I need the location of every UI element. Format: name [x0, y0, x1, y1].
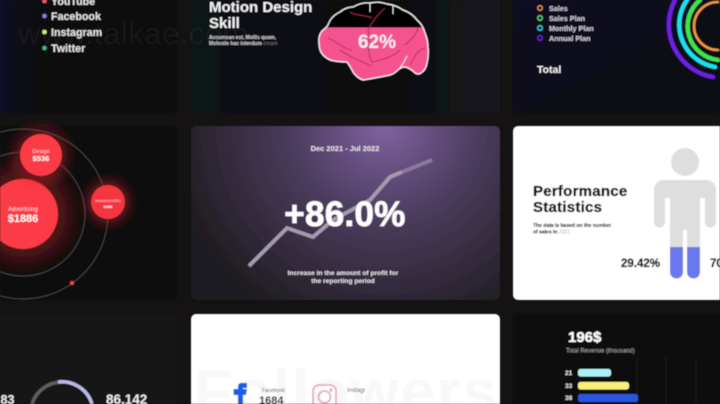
text block: skill description: Accumsan est, Mollis quam, [209, 35, 276, 41]
heading: performance statistics: Statistics [533, 199, 602, 216]
bar chart: revenue: 38 [565, 395, 573, 402]
panel: donut stats [0, 314, 177, 404]
legend: Twitter: Twitter [51, 43, 85, 55]
bar chart: revenue: 21 [565, 370, 573, 377]
legend: Annual Plan: Annual Plan [549, 34, 591, 43]
panel: expense orbits [0, 119, 177, 300]
panel: social legend [0, 0, 177, 113]
chart: profit line [249, 160, 432, 266]
icon: facebook [234, 383, 247, 404]
text block: performance note: The data is based on the number [533, 223, 611, 229]
bubble: design [6, 121, 76, 188]
label: total: Total [537, 64, 561, 76]
panel: performance statistics [513, 126, 720, 300]
chart: donut [32, 382, 92, 404]
icon: person figure [654, 148, 716, 279]
heading: motion design skill: Skill [209, 15, 240, 32]
bubble: investments: $486 [104, 204, 113, 209]
stat: facebook followers [259, 388, 285, 404]
stat: 29.42%: 29.42% [621, 258, 660, 270]
icon: brain 62% [319, 2, 428, 80]
legend: Sales Plan: Sales Plan [549, 14, 585, 23]
orbit rings [0, 129, 108, 299]
panel: sales plan rings [513, 0, 720, 113]
panel: total revenue [513, 314, 720, 404]
legend: Monthly Plan: Monthly Plan [549, 24, 594, 33]
bubble: investments [78, 172, 138, 232]
text block: skill description: Molestie hac interdum ornare [209, 41, 278, 47]
orbit dot [70, 281, 74, 285]
stat: 196$: 196$ [568, 329, 602, 346]
icon: instagram [313, 385, 336, 404]
text block: profit caption: Increase in the amount of profit for [288, 270, 398, 277]
bar chart: revenue: 33 [565, 383, 573, 390]
stat: +86.0%: +86.0% [284, 195, 406, 234]
label: instagram: Instagr [347, 388, 365, 394]
legend: Sales [538, 4, 568, 13]
label: date range: Dec 2021 - Jul 2022 [311, 144, 379, 153]
legend: Sales: Sales [549, 4, 568, 13]
bubble: advertising [0, 152, 85, 276]
panel: profit increase [191, 126, 500, 300]
bar chart: revenue [565, 358, 696, 404]
bubble: advertising: $1886 [8, 213, 38, 225]
icon: brain 62%: 62% [358, 32, 396, 53]
watermark: www.talkae.com [17, 16, 249, 51]
bubble: design: $536 [33, 154, 49, 163]
heading: performance statistics: Performance [533, 183, 627, 200]
text block: performance note: of sales in 2021 [533, 230, 570, 236]
label: total revenue: Total Revenue (thousand) [566, 348, 635, 354]
panel: followers [191, 314, 500, 404]
legend: Facebook: Facebook [51, 11, 101, 23]
bubble: investments: Investment/Ro [95, 198, 122, 203]
bubble: advertising: Advertising [8, 207, 38, 213]
stat: facebook followers: Facebook [262, 388, 285, 394]
legend: Instagram: Instagram [51, 27, 102, 39]
panel: motion design skill [191, 0, 500, 113]
text block: profit caption: the reporting period [311, 278, 375, 285]
chart: concentric rings [669, 0, 718, 77]
bubble: design: Design [32, 149, 50, 155]
